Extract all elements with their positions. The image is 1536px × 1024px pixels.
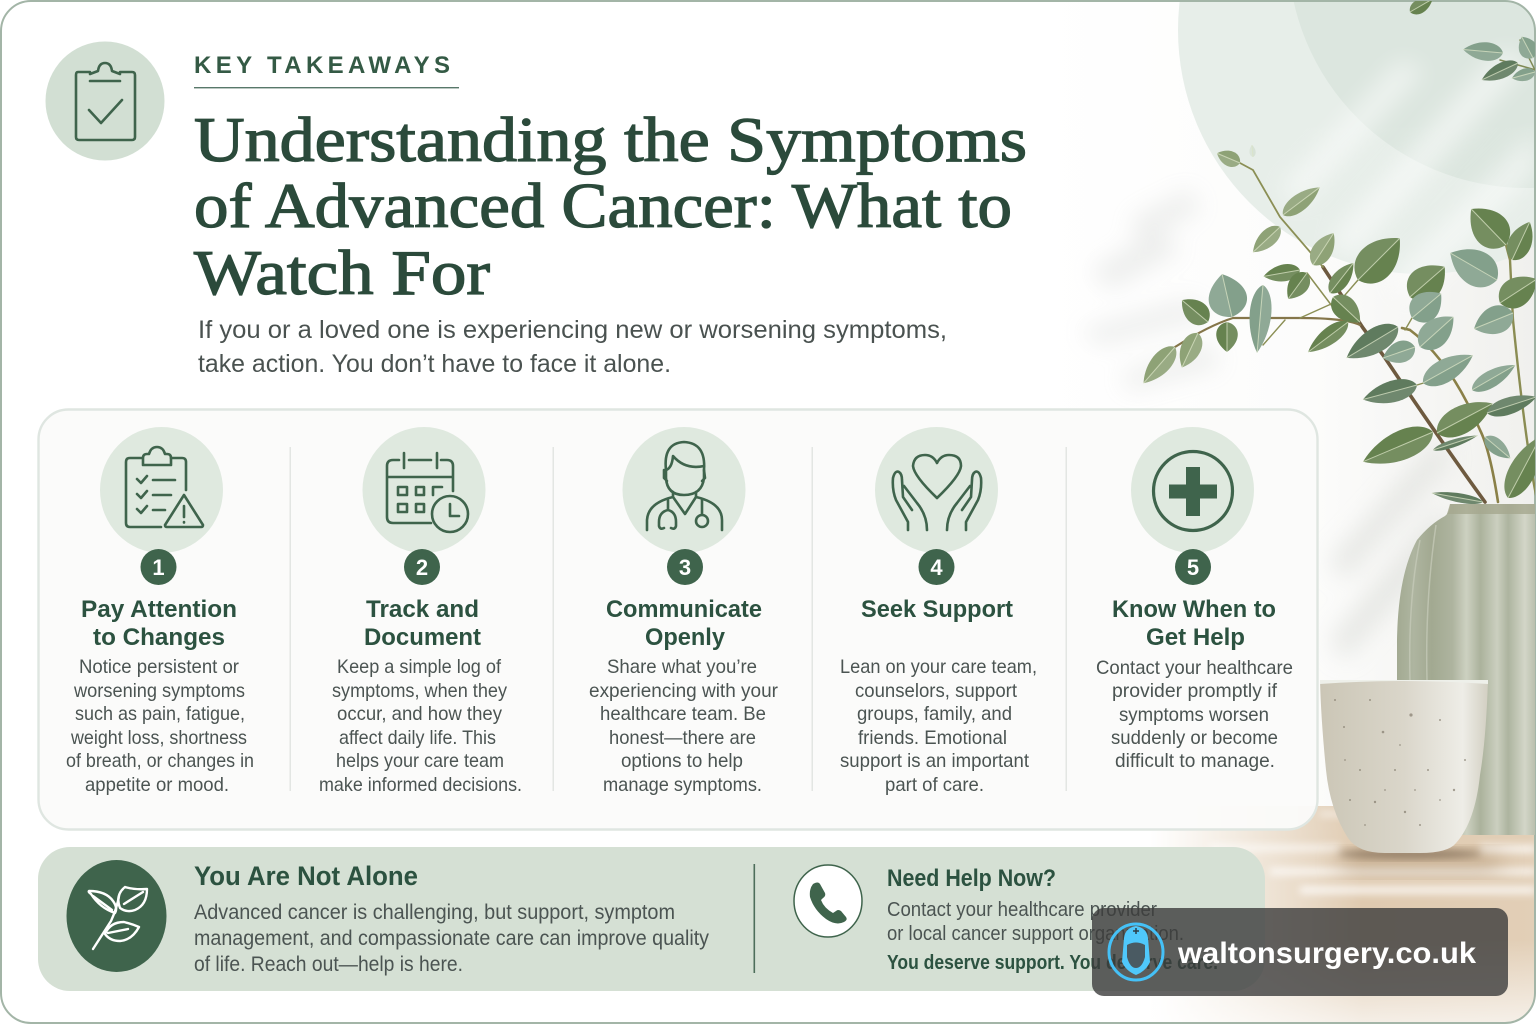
you are not alone text: You Are Not Alone <box>194 861 418 891</box>
icon: header clipboard with check <box>46 42 164 160</box>
step 4: seek support <box>840 427 1037 796</box>
icon: doctor with stethoscope <box>647 442 722 530</box>
step 1: pay attention to changes: 1 <box>152 555 165 580</box>
step 4: seek support: support is an important <box>840 750 1030 772</box>
step 2: track and document: Document <box>364 624 481 651</box>
step 5: know when to get help: provider promptly if <box>1112 680 1278 702</box>
step 3: communicate openly: Openly <box>645 624 726 651</box>
step 1: pay attention to changes: such as pain, fatigue, <box>75 703 245 725</box>
step 2: track and document: Keep a simple log of <box>337 656 502 678</box>
step 1: pay attention to changes: of breath, or changes in <box>66 750 254 772</box>
step 1: pay attention to changes: appetite or mood. <box>85 774 229 796</box>
you are not alone text: Advanced cancer is challenging, but support, symptom <box>194 900 675 924</box>
need help now text: Need Help Now? <box>887 865 1056 892</box>
step 5: know when to get help: 5 <box>1187 555 1199 580</box>
you are not alone text: of life. Reach out—help is here. <box>194 952 463 976</box>
eyebrow: key takeaways: KEY TAKEAWAYS <box>194 52 450 79</box>
step 2: track and document: 2 <box>416 555 428 580</box>
step 5: know when to get help: Get Help <box>1146 624 1245 651</box>
icon: leaf sprig <box>66 860 166 972</box>
step 5: know when to get help: Contact your healthcare <box>1096 657 1293 679</box>
step 5: know when to get help: Know When to <box>1112 596 1276 623</box>
icon: medical cross <box>1154 452 1232 530</box>
step 1: pay attention to changes <box>66 427 254 796</box>
panel: support banner <box>38 847 1265 991</box>
plant leaves <box>1136 0 1536 507</box>
icon: checklist with warning <box>126 447 203 527</box>
step 2: track and document: helps your care team <box>336 750 504 772</box>
subtitle <box>198 316 947 378</box>
step 1: pay attention to changes: worsening symptoms <box>73 680 245 702</box>
step 5: know when to get help: difficult to manage. <box>1115 750 1275 772</box>
vase <box>1397 504 1536 835</box>
step 4: seek support: groups, family, and <box>857 703 1012 725</box>
need help now text: or local cancer support organization. <box>887 923 1184 945</box>
step 5: know when to get help: symptoms worsen <box>1119 704 1269 726</box>
step 3: communicate openly: honest—there are <box>609 727 756 749</box>
step 5: know when to get help: suddenly or become <box>1111 727 1278 749</box>
step 2: track and document: symptoms, when they <box>332 680 507 702</box>
step 5: know when to get help <box>1096 427 1293 772</box>
subtitle: If you or a loved one is experiencing new or worsening symptoms, <box>198 316 947 344</box>
panel: five steps <box>38 410 1318 830</box>
icon: calendar with clock <box>387 453 468 532</box>
need help now text <box>887 865 1218 974</box>
step 3: communicate openly: options to help <box>621 750 743 772</box>
icon: hands holding heart <box>893 455 981 530</box>
cup <box>1320 680 1488 859</box>
step 1: pay attention to changes: to Changes <box>93 624 225 651</box>
step 4: seek support: Seek Support <box>861 596 1013 623</box>
title: of Advanced Cancer: What to <box>194 170 1012 241</box>
step 4: seek support: friends. Emotional <box>858 727 1007 749</box>
watermark: waltonsurgery.co.uk badge: waltonsurgery.co.uk <box>1177 937 1476 970</box>
step 4: seek support: Lean on your care team, <box>840 656 1037 678</box>
icon: nurse logo <box>1109 924 1163 980</box>
step 2: track and document <box>319 427 522 796</box>
step 4: seek support: counselors, support <box>855 680 1018 702</box>
need help now text: Contact your healthcare provider <box>887 899 1157 921</box>
icon: phone <box>794 865 862 937</box>
title: Watch For <box>194 237 490 308</box>
step 1: pay attention to changes: Pay Attention <box>81 596 237 623</box>
step 2: track and document: affect daily life. This <box>339 727 496 749</box>
step 3: communicate openly: 3 <box>679 555 691 580</box>
need help now text: You deserve support. You deserve care. <box>887 952 1218 974</box>
step 3: communicate openly: healthcare team. Be <box>600 703 766 725</box>
title <box>194 104 1027 308</box>
subtitle: take action. You don’t have to face it alone. <box>198 350 671 378</box>
watermark: waltonsurgery.co.uk badge <box>1092 908 1508 996</box>
title: Understanding the Symptoms <box>194 104 1027 175</box>
step 3: communicate openly: manage symptoms. <box>603 774 762 796</box>
step 4: seek support: part of care. <box>885 774 984 796</box>
step 3: communicate openly: experiencing with your <box>589 680 778 702</box>
step 1: pay attention to changes: Notice persistent or <box>79 656 239 678</box>
step 3: communicate openly <box>589 427 778 796</box>
step 2: track and document: Track and <box>366 596 479 623</box>
step 2: track and document: make informed decisions. <box>319 774 522 796</box>
plant stems <box>1175 40 1536 502</box>
step 1: pay attention to changes: weight loss, shortness <box>70 727 247 749</box>
step 3: communicate openly: Communicate <box>606 596 762 623</box>
step 2: track and document: occur, and how they <box>337 703 502 725</box>
you are not alone text: management, and compassionate care can improve quality <box>194 926 709 950</box>
step 3: communicate openly: Share what you’re <box>607 656 757 678</box>
illustration: vase with eucalyptus plant and cup <box>1136 0 1536 859</box>
step 4: seek support: 4 <box>930 555 943 580</box>
you are not alone text <box>194 861 709 976</box>
